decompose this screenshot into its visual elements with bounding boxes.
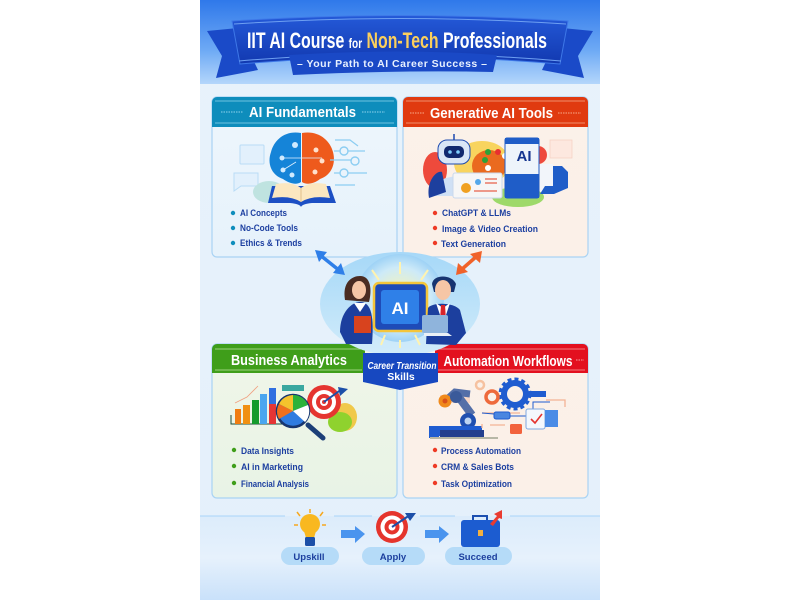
- title ribbon: [207, 16, 593, 78]
- icon: robot, palette and AI documents: AI: [516, 148, 532, 165]
- icon: briefcase with arrow: [461, 510, 502, 547]
- arrow: Apply to Succeed: [425, 526, 449, 543]
- list: Generative AI Tools bullets: [433, 208, 538, 250]
- list: Business Analytics bullets: [232, 446, 309, 490]
- heading: AI Fundamentals: AI Fundamentals: [249, 104, 356, 121]
- subtitle ribbon: [289, 52, 497, 75]
- panel: Generative AI Tools: [403, 97, 588, 257]
- arrow: orange double arrow to Generative AI Tools: [456, 251, 482, 275]
- man figure: [422, 276, 466, 345]
- poster background: [200, 0, 600, 600]
- list: Business Analytics bullets: Data Insights: [241, 446, 294, 457]
- badge: Career Transition Skills: Career Transition: [368, 361, 436, 372]
- icon: target: [376, 511, 416, 543]
- list: Generative AI Tools bullets: Text Generation: [441, 239, 506, 250]
- list: Generative AI Tools bullets: Image & Video Creation: [442, 224, 538, 235]
- heading: Generative AI Tools: Generative AI Tools: [430, 105, 553, 122]
- list: Automation Workflows bullets: [433, 446, 521, 490]
- list: AI Fundamentals bullets: AI Concepts: [240, 208, 287, 219]
- step: Upskill: [281, 509, 339, 565]
- heading: AI Fundamentals: [212, 97, 397, 127]
- list: Automation Workflows bullets: Process Automation: [441, 446, 521, 457]
- robot: [438, 140, 470, 164]
- list: Business Analytics bullets: AI in Marketing: [241, 462, 303, 473]
- header band: [200, 0, 600, 84]
- icon: robot, palette and AI documents: [423, 134, 572, 207]
- document AI: [505, 138, 539, 198]
- center: career transition illustration: [320, 252, 480, 356]
- heading: Business Analytics: Business Analytics: [231, 352, 347, 369]
- badge: Career Transition Skills: Skills: [387, 371, 415, 383]
- list: AI Fundamentals bullets: No-Code Tools: [240, 223, 298, 234]
- step: Succeed: [445, 510, 512, 565]
- list: Business Analytics bullets: Financial Analysis: [241, 479, 309, 490]
- badge: Career Transition Skills: [363, 353, 438, 390]
- footer band: [200, 516, 600, 600]
- arrow: Upskill to Apply: [341, 526, 365, 543]
- chip with AI: [374, 283, 427, 331]
- heading: Automation Workflows: Automation Workflows: [444, 353, 572, 370]
- icon: charts, magnifier and target: [231, 385, 357, 438]
- list: Automation Workflows bullets: CRM & Sales Bots: [441, 462, 514, 473]
- panel: Business Analytics: [212, 344, 397, 498]
- step: Upskill: Upskill: [293, 552, 325, 563]
- title: IIT AI Course for Non-Tech Professionals: [247, 28, 547, 53]
- subtitle ribbon: – Your Path to AI Career Success –: [297, 58, 487, 70]
- heading: Automation Workflows: [435, 344, 588, 373]
- step: Succeed: Succeed: [458, 552, 498, 563]
- heading: Generative AI Tools: [403, 97, 588, 127]
- step: Apply: Apply: [380, 552, 407, 563]
- arrow: blue double arrow to AI Fundamentals: [315, 250, 345, 275]
- list: Generative AI Tools bullets: ChatGPT & LLMs: [442, 208, 511, 219]
- chip with AI: AI: [392, 299, 408, 318]
- woman figure: [340, 276, 373, 344]
- panel: Automation Workflows: [403, 344, 588, 498]
- list: Automation Workflows bullets: Task Optimization: [441, 479, 512, 490]
- icon: robot arm, gears and checklist: [429, 379, 565, 439]
- list: AI Fundamentals bullets: Ethics & Trends: [240, 238, 302, 249]
- list: AI Fundamentals bullets: [231, 208, 302, 249]
- panel: AI Fundamentals: [212, 97, 397, 257]
- icon: brain on book: [234, 132, 367, 207]
- step: Apply: [362, 511, 425, 565]
- heading: Business Analytics: [212, 344, 365, 373]
- icon: light bulb: [294, 509, 326, 546]
